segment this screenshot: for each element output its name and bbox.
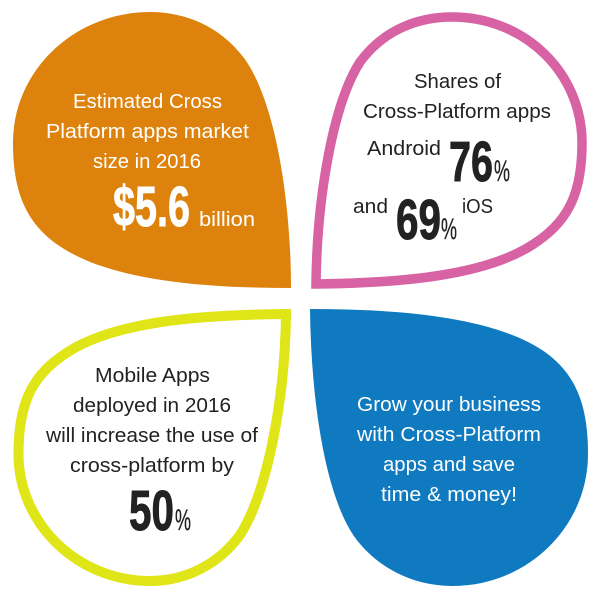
shares text: iOS [462, 195, 493, 218]
lime petal outline [18, 314, 286, 581]
market size text: size in 2016 [93, 150, 201, 173]
market size text: Estimated Cross [73, 90, 222, 113]
mobile apps text: cross-platform by [70, 454, 235, 477]
market size text: billion [199, 208, 255, 231]
ios figure: 69 [396, 188, 441, 252]
market size text: Platform apps market [46, 120, 249, 143]
shares text: Shares of [414, 70, 501, 93]
increase figure: % [175, 504, 191, 537]
mobile apps text: will increase the use of [45, 424, 258, 447]
android figure: 76 [449, 130, 493, 194]
call to action text [356, 393, 541, 506]
shares text: and [353, 195, 388, 218]
shares text [353, 70, 551, 218]
increase figure: 50 [129, 479, 174, 543]
ios figure: % [441, 213, 457, 246]
mobile apps text [45, 364, 258, 477]
shares text: Cross-Platform apps [363, 100, 551, 123]
market size text [46, 90, 255, 231]
call to action text: with Cross-Platform [356, 423, 541, 446]
call to action text: apps and save [383, 453, 515, 476]
mobile apps text: deployed in 2016 [73, 394, 231, 417]
panel: call to action [310, 309, 588, 586]
orange petal [13, 12, 291, 288]
android figure: % [494, 155, 510, 188]
shares text: Android [367, 137, 441, 160]
panel: mobile apps deployed [18, 314, 286, 581]
panel: shares of cross-platform apps [316, 17, 582, 284]
pink petal outline [316, 17, 582, 284]
call to action text: Grow your business [357, 393, 541, 416]
mobile apps text: Mobile Apps [95, 364, 210, 387]
market size figure: $5.6 [113, 175, 190, 239]
panel: market size [13, 12, 291, 288]
blue petal [310, 309, 588, 586]
call to action text: time & money! [381, 483, 517, 506]
